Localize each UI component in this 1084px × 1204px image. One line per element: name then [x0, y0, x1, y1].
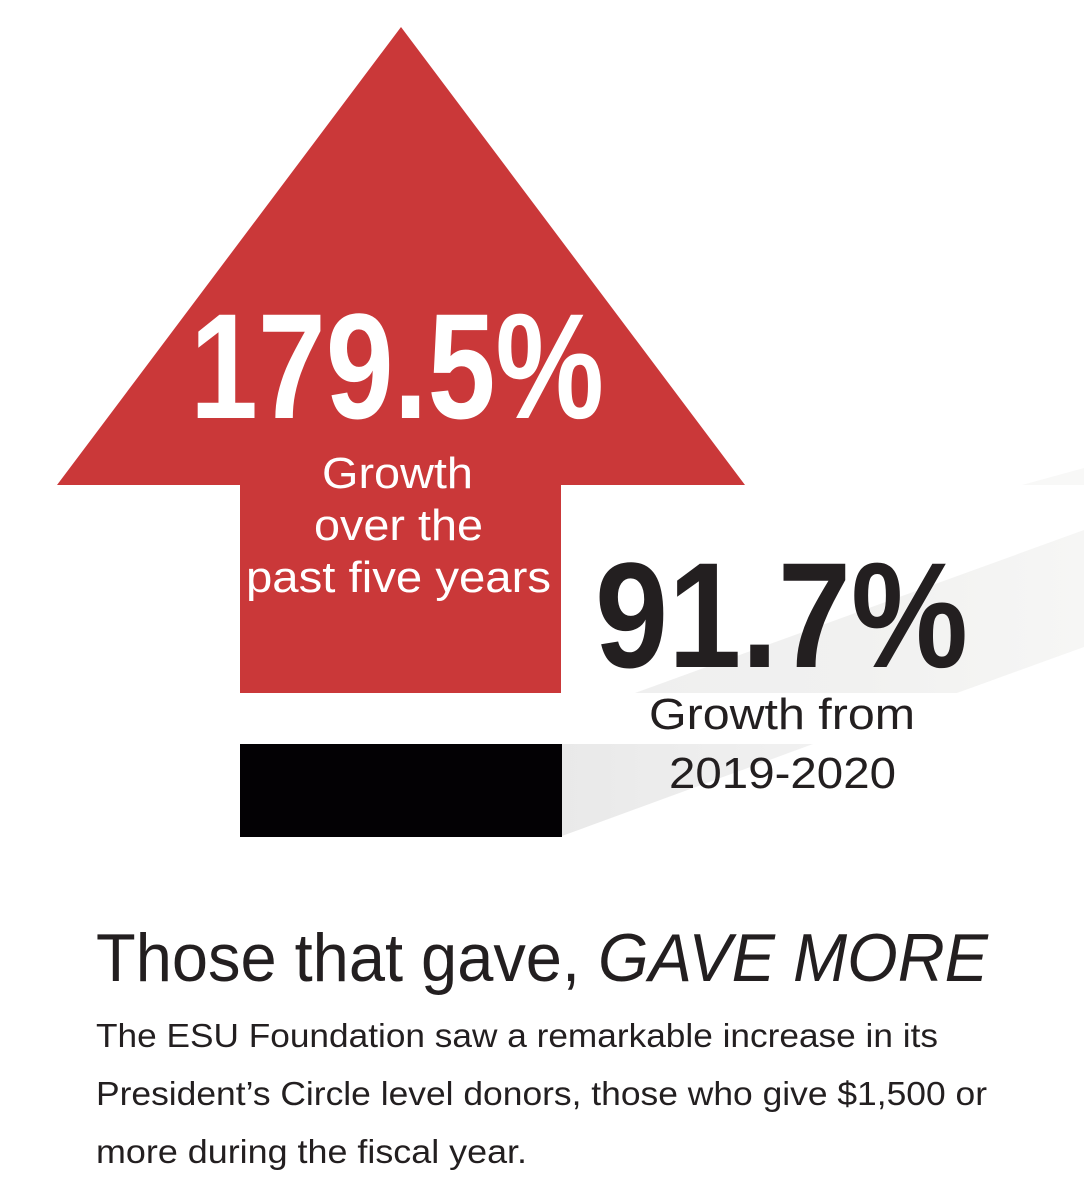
- body text: [96, 1017, 987, 1170]
- caption: growth over the past five years: past five years: [246, 553, 551, 602]
- caption: growth over the past five years: Growth: [322, 449, 473, 498]
- heading: Those that gave, GAVE MORE: [96, 920, 989, 996]
- number 179.5%: 179.5%: [190, 282, 604, 450]
- caption: growth from 2019-2020: 2019-2020: [669, 749, 896, 798]
- caption: growth from 2019-2020: Growth from: [649, 690, 915, 739]
- red up arrow: [57, 27, 745, 693]
- lower grey shadow: [562, 744, 813, 836]
- upper grey shadow: [635, 530, 1084, 693]
- caption: growth over the past five years: over the: [314, 501, 483, 550]
- caption: growth from 2019-2020: [649, 690, 915, 798]
- stat: 91.7%: [595, 531, 968, 798]
- caption: growth over the past five years: [246, 449, 551, 602]
- body text: President’s Circle level donors, those who give $1,500 or: [96, 1075, 987, 1112]
- body text: more during the fiscal year.: [96, 1133, 527, 1170]
- black bar: [240, 744, 562, 837]
- number 91.7%: 91.7%: [595, 531, 968, 699]
- faint top-right shadow: [1022, 468, 1084, 485]
- body text: The ESU Foundation saw a remarkable increase in its: [96, 1017, 938, 1054]
- stat: 179.5%: [190, 282, 604, 602]
